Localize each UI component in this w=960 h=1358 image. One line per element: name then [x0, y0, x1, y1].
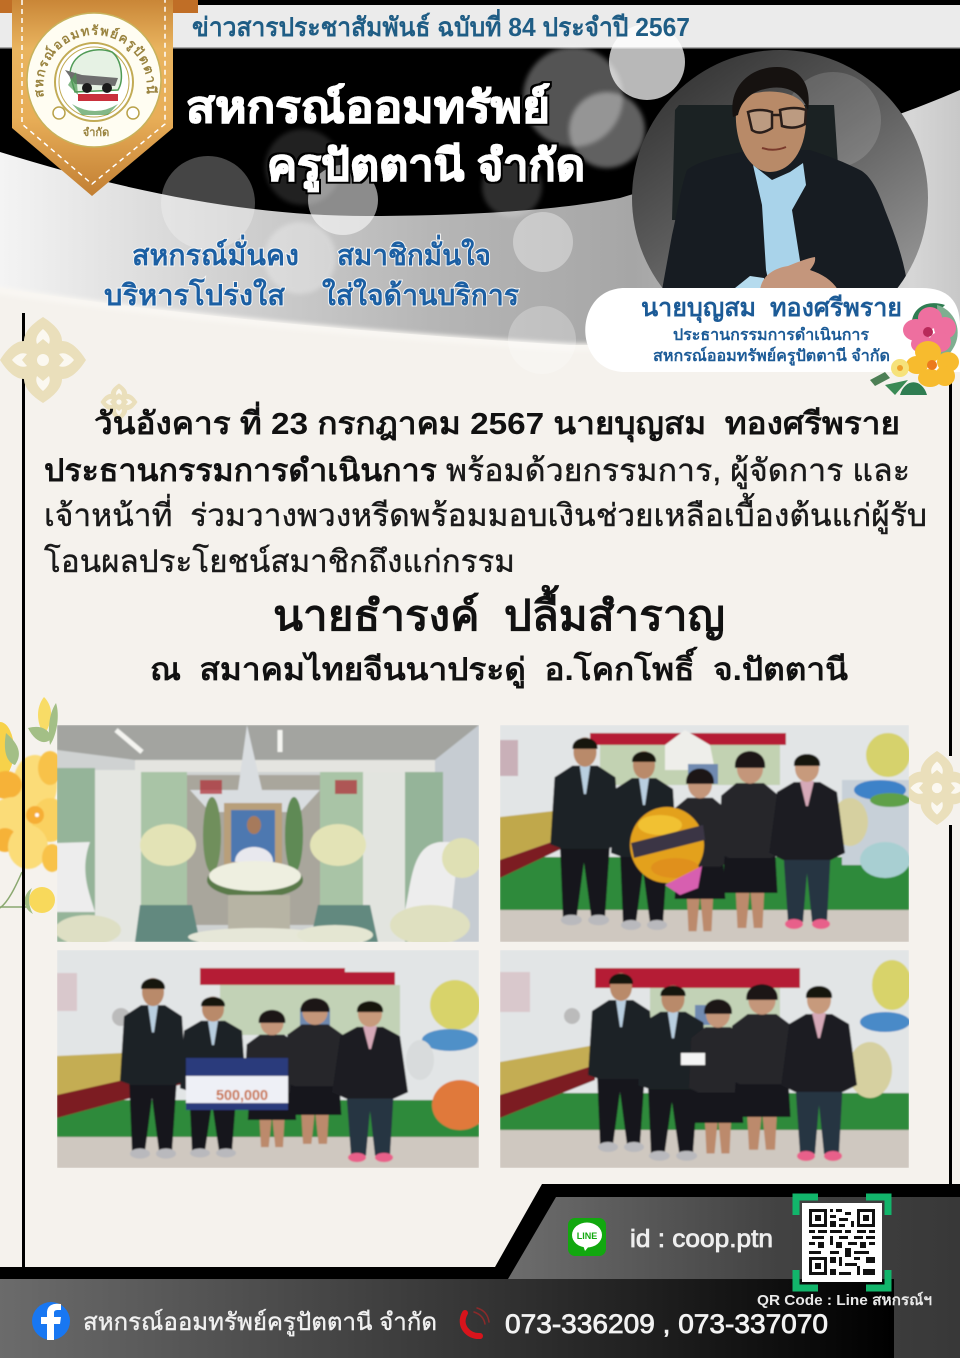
seal	[26, 12, 162, 148]
seal: สหกรณ์ออมทรัพย์ครูปัตตานี	[35, 24, 158, 98]
cheque sign: 500,000	[216, 1087, 268, 1104]
newsletter heading: ข่าวสารประชาสัมพันธ์ ฉบับที่ 84 ประจำปี 2567	[192, 8, 690, 42]
line id: id : coop.ptn	[630, 1225, 773, 1253]
body text: เจ้าหน้าที่ ร่วมวางพวงหรีดพร้อมมอบเงินช่วยเหลือเบื้องต้นแก่ผู้รับ	[44, 493, 927, 534]
hands	[760, 257, 838, 290]
bottom contact bar	[0, 1279, 894, 1358]
body text	[44, 401, 927, 579]
body text: วันอังคาร ที่ 23 กรกฎาคม 2567 นายบุญสม ทองศรีพราย	[94, 401, 900, 443]
mouth	[762, 147, 786, 150]
chairman portrait	[632, 50, 928, 288]
title: ครูปัตตานี จำกัด	[267, 142, 585, 192]
cheque sign	[186, 1058, 288, 1110]
photo: envelope handover	[500, 950, 912, 1168]
jacket	[662, 150, 908, 290]
photo: funeral altar	[55, 725, 482, 946]
footer line panel background	[0, 1184, 960, 1358]
icon: LINE: LINE	[577, 1231, 597, 1241]
name plate: สหกรณ์ออมทรัพย์ครูปัตตานี จำกัด	[653, 346, 890, 367]
chair	[672, 105, 838, 220]
slogan: บริหารโปร่งใส	[104, 277, 285, 312]
title	[186, 83, 585, 192]
decorative bubbles	[161, 24, 685, 374]
medal badge with seal	[0, 0, 198, 196]
slogan: สหกรณ์มั่นคง	[132, 234, 299, 272]
QR caption: QR Code : Line สหกรณ์ฯ	[757, 1291, 932, 1309]
photo: cheque presentation	[57, 950, 488, 1168]
glasses	[748, 108, 806, 133]
hair	[732, 67, 809, 117]
slogan: สมาชิกมั่นใจ	[337, 234, 491, 272]
right frame line	[949, 360, 952, 1185]
seal: จำกัด	[83, 126, 109, 139]
left frame line	[22, 313, 25, 1267]
cuff	[735, 276, 764, 288]
icon: phone	[463, 1308, 489, 1336]
slogan	[104, 234, 519, 312]
body text: ประธานกรรมการดำเนินการ พร้อมด้วยกรรมการ, ผู้จัดการ และ	[44, 453, 910, 489]
name plate	[585, 288, 960, 372]
photo: wreath group	[500, 725, 910, 942]
header background	[0, 0, 960, 347]
icon: facebook	[32, 1302, 70, 1340]
deceased member name: นายธำรงค์ ปลื้มสำราญ	[273, 584, 725, 641]
wreath	[630, 807, 705, 895]
shirt	[753, 163, 806, 288]
facebook page name: สหกรณ์ออมทรัพย์ครูปัตตานี จำกัด	[83, 1308, 437, 1337]
ornament left	[0, 317, 86, 403]
yellow flowers left	[0, 697, 68, 914]
ornament small	[101, 384, 137, 420]
phone numbers: 073-336209 , 073-337070	[505, 1309, 828, 1339]
ornament right	[900, 751, 960, 825]
title: สหกรณ์ออมทรัพย์	[186, 83, 550, 132]
name plate: ประธานกรรมการดำเนินการ	[673, 326, 869, 344]
icon: LINE	[568, 1218, 606, 1256]
tropical flowers	[870, 303, 959, 395]
slogan: ใส่ใจด้านบริการ	[322, 278, 519, 312]
QR code	[796, 1197, 888, 1288]
name plate: นายบุญสม ทองศรีพราย	[641, 294, 902, 324]
face	[736, 91, 806, 172]
location: ณ สมาคมไทยจีนนาประดู่ อ.โคกโพธิ์ จ.ปัตตานี	[150, 646, 848, 689]
body text: โอนผลประโยชน์สมาชิกถึงแก่กรรม	[44, 544, 515, 579]
